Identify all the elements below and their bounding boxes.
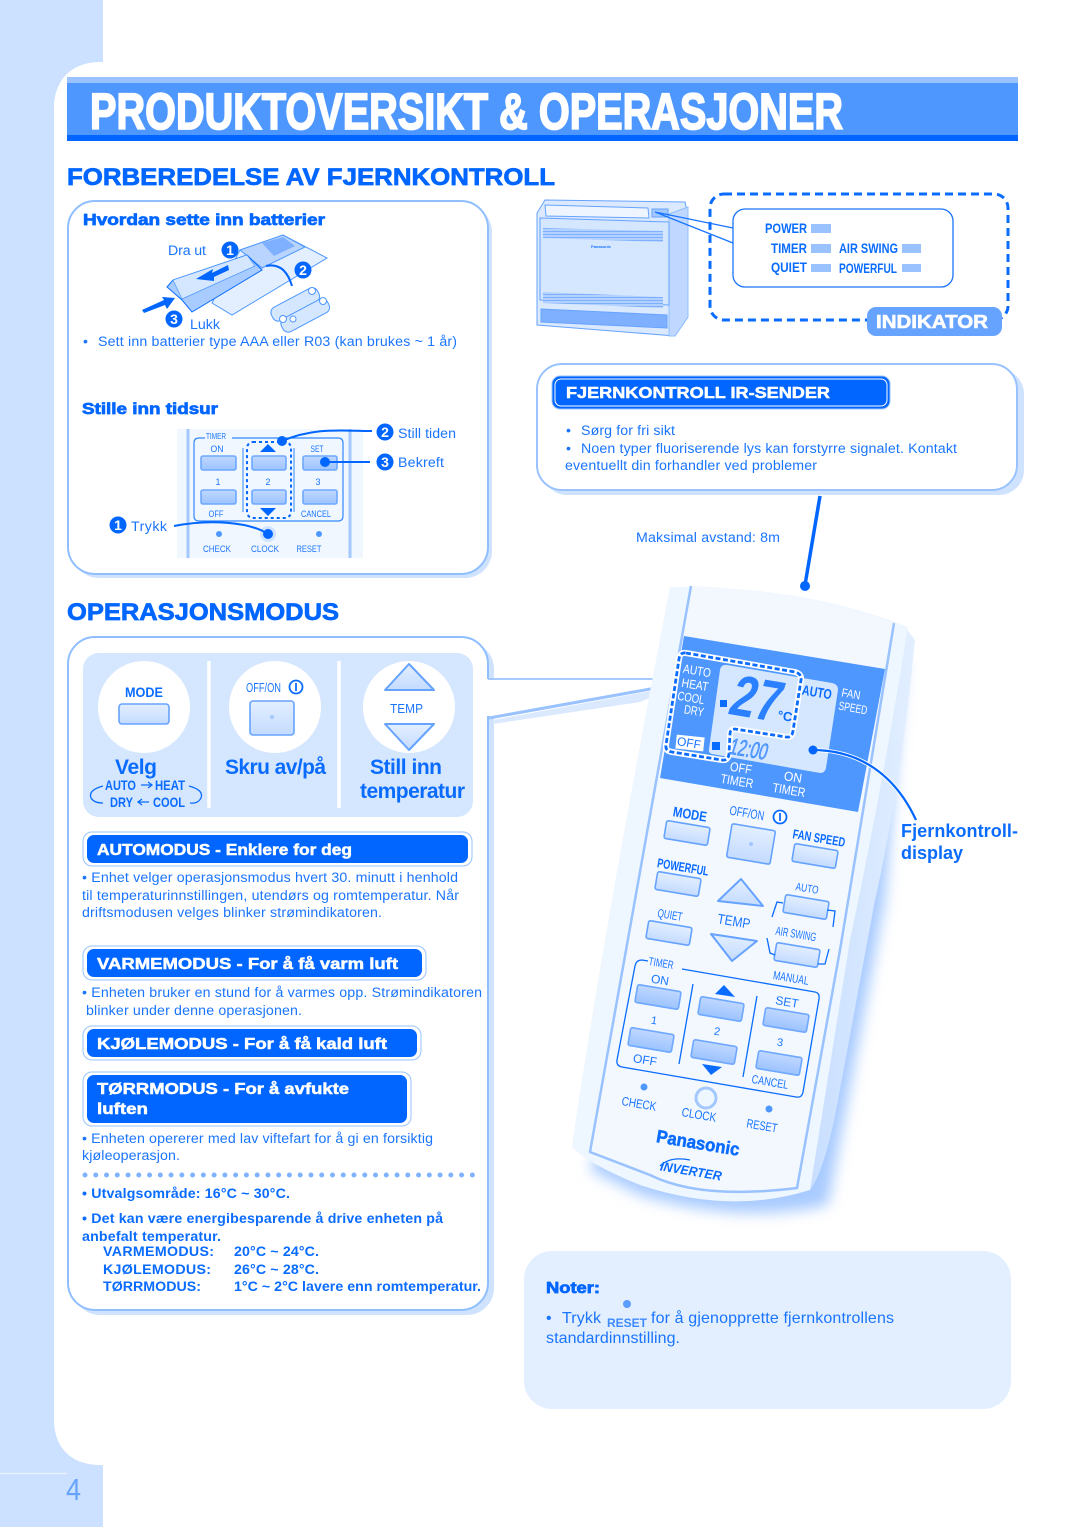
callout numbers: battery steps: 2 — [299, 262, 307, 278]
remote: timer section: TIMER — [648, 956, 674, 972]
text: varmemodus: • Enheten bruker en stund for å varmes opp. Strømindikatoren — [82, 985, 482, 1001]
text: battery type: Sett inn batterier type AAA eller R03 (kan brukes ~ 1 år) — [98, 334, 457, 350]
remote: upper buttons — [646, 803, 846, 988]
remote: temperature readout: °C — [777, 707, 794, 725]
callout: still tiden — [277, 424, 456, 446]
remote: display labels: FAN — [840, 686, 862, 702]
remote: brand — [655, 1126, 741, 1184]
indicator callout — [655, 194, 1008, 336]
text: varmemodus — [82, 985, 482, 1019]
heading bar: varmemodus — [83, 946, 426, 980]
heading: batteries: Hvordan sette inn batterier — [83, 212, 325, 229]
remote: timer section: CANCEL — [751, 1072, 790, 1092]
text: automodus: • Enhet velger operasjonsmodus hvert 30. minutt i henhold — [82, 870, 458, 886]
remote: check, clock, reset: RESET — [746, 1117, 779, 1136]
text: temperature ranges: • Utvalgsområde: 16°C ~ 30°C. — [82, 1186, 290, 1202]
air conditioner unit — [537, 200, 688, 336]
text: temperature ranges — [82, 1186, 481, 1295]
illustration: timer buttons: CLOCK — [251, 544, 279, 554]
illustration: timer buttons: 3 — [315, 477, 321, 487]
label: remote display — [901, 821, 1018, 863]
heading bar: kjølemodus: KJØLEMODUS - For å få kald luft — [97, 1036, 387, 1053]
remote: display labels: TIMER — [719, 771, 755, 791]
text: temperature ranges: 20°C ~ 24°C. — [234, 1244, 319, 1260]
remote: upper buttons: MANUAL — [772, 968, 810, 988]
remote: upper buttons: AUTO — [795, 881, 820, 897]
indicator: tag: INDIKATOR — [876, 312, 988, 332]
remote: upper buttons: FAN SPEED — [792, 826, 846, 850]
text: tørrmodus — [82, 1131, 433, 1164]
label: velg: Velg — [115, 756, 157, 779]
remote: display labels: AUTO — [682, 662, 712, 680]
heading bar: kjølemodus — [83, 1026, 421, 1060]
label: remote display: display — [901, 843, 963, 863]
indicator: labels: POWER — [765, 220, 807, 236]
remote: display labels: ON — [783, 768, 803, 786]
remote: temperature readout: 12:00 — [726, 733, 772, 765]
remote: upper buttons: AIR SWING — [775, 924, 817, 944]
indicator: labels: AIR SWING — [839, 240, 898, 256]
remote: temperature readout: 27 — [723, 664, 791, 734]
heading: forberedelse: FORBEREDELSE AV FJERNKONTROLL — [67, 164, 555, 191]
text: temperature ranges: VARMEMODUS: — [103, 1244, 214, 1260]
text: notes body: for å gjenopprette fjernkontrollens — [651, 1309, 894, 1327]
title banner: PRODUKTOVERSIKT & OPERASJONER — [90, 83, 843, 140]
panel: batteries and timer — [68, 201, 492, 578]
remote: display labels: AUTO — [801, 682, 833, 702]
mode button strip — [83, 653, 473, 817]
heading: operasjonsmodus: OPERASJONSMODUS — [67, 599, 339, 626]
text: temperature ranges: TØRRMODUS: — [103, 1279, 201, 1295]
air conditioner unit: Panasonic — [591, 244, 612, 249]
callout numbers: battery steps — [166, 242, 312, 328]
text: temperature ranges: KJØLEMODUS: — [103, 1262, 211, 1278]
remote: brand: Panasonic — [655, 1126, 741, 1160]
remote: timer section: 2 — [713, 1026, 721, 1038]
remote: timer section: 1 — [650, 1015, 658, 1027]
icon: mode button: MODE — [125, 684, 163, 700]
text: temperature ranges: 1°C ~ 2°C lavere enn romtemperatur. — [234, 1279, 481, 1295]
indicator: labels — [765, 220, 921, 276]
remote: timer section: 3 — [776, 1037, 784, 1049]
remote: display labels: SPEED — [838, 699, 869, 717]
callout numbers: battery steps: 1 — [226, 242, 234, 258]
illustration: timer buttons: 1 — [215, 477, 221, 487]
heading bar: tørrmodus: TØRRMODUS - For å avfukte — [97, 1081, 349, 1098]
indicator: labels: POWERFUL — [839, 260, 897, 276]
remote: check, clock, reset: CLOCK — [681, 1105, 718, 1125]
illustration: battery insertion — [142, 235, 332, 334]
panel: operating modes — [68, 637, 494, 1315]
text: IR notes: eventuellt din forhandler ved problemer — [565, 458, 817, 474]
text: IR notes: Sørg for fri sikt — [581, 423, 675, 439]
illustration: timer buttons: OFF — [208, 509, 224, 519]
icon: temp buttons: TEMP — [390, 701, 423, 716]
arrow: IR beam — [800, 496, 820, 591]
illustration: timer buttons: 2 — [265, 477, 271, 487]
illustration: timer buttons: SET — [310, 444, 324, 454]
text: IR notes — [565, 423, 957, 474]
remote: body — [572, 586, 915, 1201]
mode cycle: DRY — [110, 794, 134, 810]
callout: trykk: 1 — [114, 517, 122, 533]
heading bar: IR sender: FJERNKONTROLL IR-SENDER — [566, 385, 830, 402]
label: still inn temperatur — [360, 756, 465, 803]
callout: still tiden: Still tiden — [398, 426, 456, 442]
remote: leader to display label — [808, 746, 916, 820]
callout: bekreft — [320, 454, 444, 471]
icon: off/on button: OFF/ON — [246, 680, 281, 695]
heading bar: automodus: AUTOMODUS - Enklere for deg — [97, 842, 352, 859]
heading bar: varmemodus: VARMEMODUS - For å få varm luft — [97, 956, 398, 973]
mode cycle: AUTO — [105, 777, 136, 793]
remote: display labels: HEAT — [681, 676, 710, 694]
remote: check, clock, reset — [621, 1084, 779, 1136]
remote: dashed highlight — [666, 653, 801, 760]
text: temperature ranges: • Det kan være energibesparende å drive enheten på — [82, 1211, 443, 1227]
remote: brand: INVERTER — [659, 1158, 723, 1184]
text: automodus: til temperaturinnstillingen, utendørs og romtemperatur. Når — [82, 888, 459, 904]
label: dra ut: Dra ut — [168, 243, 206, 259]
remote: display labels: OFF — [676, 734, 702, 752]
mode cycle: HEAT — [155, 777, 185, 793]
text: IR notes: • — [566, 441, 571, 457]
callout: bekreft: Bekreft — [398, 455, 444, 471]
indicator: labels: QUIET — [771, 259, 807, 275]
text: temperature ranges: anbefalt temperatur. — [82, 1229, 221, 1245]
illustration: timer buttons: ON — [210, 444, 224, 454]
panel: notes — [524, 1251, 1011, 1409]
remote: upper buttons: OFF/ON — [729, 803, 765, 823]
label: skru av/på: Skru av/på — [225, 756, 326, 779]
remote: display band — [660, 636, 885, 812]
indicator: tag — [867, 307, 1002, 336]
callout: trykk — [110, 516, 273, 539]
text: battery type: • — [83, 334, 88, 350]
remote: display labels — [675, 662, 869, 800]
label: still inn temperatur: temperatur — [360, 780, 465, 803]
remote: display labels: OFF — [729, 759, 753, 777]
remote: timer section — [617, 956, 819, 1097]
callout numbers: battery steps: 3 — [170, 311, 178, 327]
label: lukk: Lukk — [190, 317, 221, 333]
remote: upper buttons: QUIET — [657, 906, 684, 924]
remote: timer section: ON — [650, 972, 670, 988]
text: IR notes: • — [566, 423, 571, 439]
illustration: timer buttons: RESET — [296, 544, 322, 554]
heading: notes: Noter: — [546, 1280, 600, 1297]
label: still inn temperatur: Still inn — [370, 756, 442, 779]
callout: bekreft: 3 — [381, 454, 389, 470]
icon: off/on button — [246, 680, 302, 735]
remote: upper buttons: POWERFUL — [656, 855, 710, 879]
indicator: labels: TIMER — [771, 240, 807, 256]
remote: display labels: DRY — [683, 702, 706, 720]
page number — [0, 1472, 81, 1507]
text: notes body: • — [546, 1310, 552, 1327]
text: notes body: standardinnstilling. — [546, 1330, 680, 1347]
remote: display labels: COOL — [677, 689, 705, 707]
heading: timer: Stille inn tidsur — [82, 401, 218, 418]
text: notes body — [546, 1300, 894, 1347]
text: automodus — [82, 870, 459, 921]
remote: upper buttons: MODE — [672, 803, 708, 825]
callout wedge: panel to display — [485, 679, 682, 724]
remote: temperature readout — [712, 664, 794, 765]
heading bar: IR sender — [552, 376, 890, 409]
text: notes body: Trykk — [562, 1310, 602, 1327]
illustration: timer buttons — [177, 429, 363, 558]
page number: 4 — [66, 1472, 81, 1507]
label: remote display: Fjernkontroll- — [901, 821, 1018, 841]
mode cycle — [90, 777, 202, 810]
remote: lcd — [709, 665, 838, 773]
text: notes body: RESET — [607, 1316, 648, 1330]
text: varmemodus: blinker under denne operasjonen. — [86, 1003, 302, 1019]
illustration: timer buttons: TIMER — [206, 431, 226, 441]
icon: mode button — [119, 684, 169, 724]
remote: check, clock, reset: CHECK — [621, 1094, 658, 1114]
label: max distance: Maksimal avstand: 8m — [636, 530, 780, 546]
heading bar: tørrmodus — [83, 1072, 411, 1126]
remote: shadow — [590, 660, 905, 1213]
remote control — [572, 586, 916, 1213]
remote: timer section: SET — [774, 993, 800, 1011]
illustration: timer buttons: CHECK — [203, 544, 231, 554]
heading bar: tørrmodus: luften — [97, 1101, 148, 1118]
text: IR notes: Noen typer fluoriserende lys kan forstyrre signalet. Kontakt — [581, 441, 957, 457]
illustration: timer buttons: CANCEL — [301, 509, 331, 519]
text: tørrmodus: kjøleoperasjon. — [82, 1148, 180, 1164]
icon: temp buttons — [385, 664, 434, 750]
page background band — [0, 0, 103, 1527]
callout: trykk: Trykk — [131, 519, 168, 535]
remote: display labels: TIMER — [771, 780, 807, 800]
text: temperature ranges: 26°C ~ 28°C. — [234, 1262, 319, 1278]
text: automodus: driftsmodusen velges blinker strømindikatoren. — [82, 905, 382, 921]
text: tørrmodus: • Enheten opererer med lav viftefart for å gi en forsiktig — [82, 1131, 433, 1147]
callout: still tiden: 2 — [381, 424, 389, 440]
mode cycle: COOL — [153, 794, 185, 810]
remote: upper buttons: TEMP — [716, 910, 752, 932]
panel: IR sender — [537, 364, 1024, 495]
heading bar: automodus — [83, 832, 472, 866]
remote: timer section: OFF — [632, 1051, 658, 1069]
